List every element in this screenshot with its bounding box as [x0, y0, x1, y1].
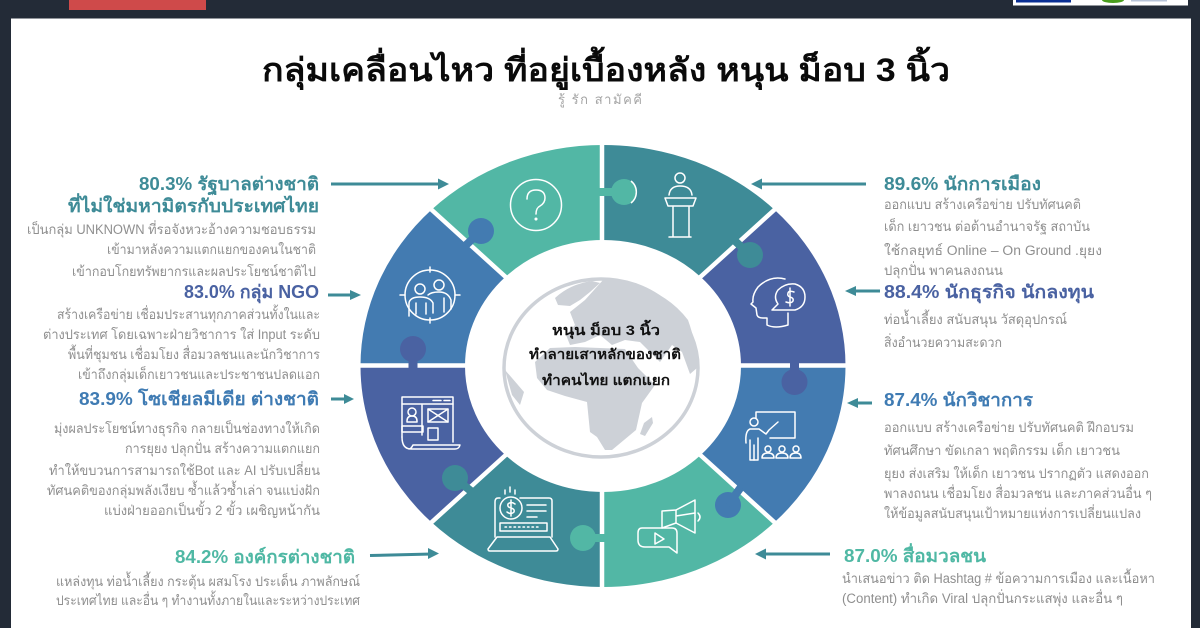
- text block: foreign governments: เป็นกลุ่ม UNKNOWN ที่รอจังหวะอ้างความชอบธรรม: [27, 220, 316, 238]
- arrow: foreign social media: [331, 394, 354, 404]
- land: Africa: [535, 347, 655, 450]
- arrow: NGO: [328, 290, 361, 300]
- logo strip at top right: [1013, 0, 1188, 6]
- text block: mass media: 87.0% สื่อมวลชน: [844, 543, 987, 566]
- center text: ทำลายเสาหลักของชาติ: [529, 346, 681, 362]
- land: Greenland: [555, 281, 600, 306]
- puzzle knob: indigo into blue: [782, 361, 808, 395]
- red tab at top: [69, 0, 206, 10]
- text block: foreign social media: แบ่งฝ่ายออกเป็นขั้ว 2 ขั้ว เผชิญหน้ากัน: [104, 500, 320, 518]
- text block: foreign governments: 80.3% รัฐบาลต่างชาติ: [139, 174, 319, 196]
- segment: right-upper indigo: [701, 210, 846, 366]
- text block: politicians: ออกแบบ สร้างเครือข่าย ปรับทัศนคติ: [884, 197, 1081, 212]
- arrow: politicians: [751, 178, 866, 190]
- icon: question mark: [510, 180, 562, 230]
- text block: international organizations: [56, 546, 360, 608]
- text block: academics: ออกแบบ สร้างเครือข่าย ปรับทัศนคติ ฝึกอบรม: [884, 420, 1134, 435]
- text block: academics: ให้ข้อมูลสนับสนุนเป้าหมายแห่งการเปลี่ยนแปลง: [884, 504, 1141, 522]
- text block: mass media: นำเสนอข่าว ติด Hashtag # ข้อความการเมือง และเนื้อหา: [842, 568, 1155, 586]
- land: Eurasia: [566, 280, 697, 374]
- center globe: [504, 279, 698, 457]
- puzzle knob: blue into green left: [465, 218, 494, 246]
- text block: politicians: [884, 174, 1102, 279]
- icon: people in target: [400, 267, 460, 323]
- text block: academics: ทัศนศึกษา ขัดเกลา พฤติกรรม เด็ก เยาวชน: [884, 441, 1120, 458]
- text block: foreign social media: 83.9% โซเชียลมีเดีย ต่างชาติ: [79, 388, 319, 409]
- text block: NGO: [43, 282, 320, 383]
- text block: business: สิ่งอำนวยความสะดวก: [884, 333, 1002, 350]
- icon: speaker at podium: [665, 173, 696, 237]
- text block: international organizations: แหล่งทุน ท่อน้ำเลี้ยง กระตุ้น ผสมโรง ประเด็น ภาพลักษณ์: [56, 571, 360, 590]
- text block: academics: 87.4% นักวิชาการ: [884, 390, 1033, 410]
- text block: politicians: ใช้กลยุทธ์ Online – On Ground .ยุยง: [884, 242, 1102, 259]
- segment: top-right teal: [603, 145, 774, 277]
- text block: foreign social media: ทัศนคติของกลุ่มพลังเงียบ ซ้ำแล้วซ้ำเล่า จนแบ่งฝัก: [47, 480, 320, 499]
- text block: NGO: พื้นที่ชุมชน เชื่อมโยง สื่อมวลชนและนักวิชาการ: [68, 344, 320, 363]
- puzzle knob: teal into indigo left: [442, 465, 472, 492]
- center text: หนุน ม็อบ 3 นิ้ว: [552, 319, 660, 339]
- text block: foreign governments: เข้ากอบโกยทรัพยากรและผลประโยชน์ชาติไป: [72, 263, 316, 279]
- text block: business: ท่อน้ำเลี้ยง สนับสนุน วัสดุอุปกรณ์: [884, 309, 1067, 328]
- text block: foreign social media: การยุยง ปลุกปั่น สร้างความแตกแยก: [125, 439, 320, 457]
- icon: teacher with students: [746, 412, 801, 460]
- segment: bottom-left teal: [432, 455, 603, 587]
- text block: international organizations: 84.2% องค์กรต่างชาติ: [175, 546, 355, 567]
- arrow: mass media: [755, 548, 830, 560]
- arrow: international organizations: [370, 548, 439, 559]
- arrow: academics: [847, 398, 872, 408]
- arrow: business: [845, 286, 880, 296]
- text block: NGO: ต่างประเทศ โดยเฉพาะฝ่ายวิชาการ ใส่ Input ระดับ: [43, 326, 320, 342]
- ring diagram: [355, 140, 851, 592]
- center text: [529, 319, 681, 388]
- text block: politicians: ปลุกปั่น พาคนลงถนน: [884, 261, 1003, 279]
- text block: academics: พาลงถนน เชื่อมโยง สื่อมวลชน และภาคส่วนอื่น ๆ: [884, 484, 1152, 501]
- text block: foreign governments: ที่ไม่ใช่มหามิตรกับประเทศไทย: [68, 193, 319, 216]
- arrow: foreign governments: [331, 178, 449, 190]
- text block: foreign governments: [27, 174, 319, 279]
- text block: foreign social media: [47, 388, 320, 518]
- text block: business: 88.4% นักธุรกิจ นักลงทุน: [884, 282, 1095, 304]
- text block: mass media: [842, 543, 1155, 607]
- segment: right-lower blue: [701, 366, 846, 522]
- globe outline: [504, 279, 698, 457]
- text block: NGO: เข้าถึงกลุ่มเด็กเยาวชนและประชาชนปลดแอก: [78, 365, 320, 383]
- segment: left-upper blue: [360, 210, 505, 366]
- text block: international organizations: ประเทศไทย และอื่น ๆ ทำงานทั้งภายในและระหว่างประเทศ: [56, 590, 360, 608]
- icon: head with dollar bubble: [751, 278, 805, 327]
- puzzle knob: teal into indigo: [734, 240, 763, 268]
- land: South America: [505, 370, 524, 405]
- segment: bottom-right green: [603, 455, 774, 587]
- text block: business: [884, 282, 1095, 350]
- title: กลุ่มเคลื่อนไหว ที่อยู่เบื้องหลัง หนุน ม็อบ 3 นิ้ว: [262, 46, 950, 91]
- text block: NGO: 83.0% กลุ่ม NGO: [184, 282, 319, 304]
- puzzle knob: indigo into blue left: [400, 336, 426, 370]
- text block: academics: ยุยง ส่งเสริม ให้เด็ก เยาวชน ปรากฏตัว แสดงออก: [884, 464, 1149, 482]
- text block: mass media: (Content) ทำเกิด Viral ปลุกปั่นกระแสพุ่ง และอื่น ๆ: [842, 589, 1123, 607]
- puzzle knob: blue into green: [715, 487, 741, 518]
- text block: foreign social media: ทำให้ขบวนการสามารถใช้Bot และ AI ปรับเปลี่ยน: [49, 461, 320, 478]
- subtitle: รู้ รัก สามัคคี: [558, 92, 642, 108]
- text block: politicians: 89.6% นักการเมือง: [884, 174, 1041, 194]
- land: Madagascar: [640, 417, 653, 436]
- puzzle knob: green into teal: [598, 179, 637, 205]
- icon: megaphone and video bubble: [638, 500, 700, 553]
- text block: foreign social media: มุ่งผลประโยชน์ทางธุรกิจ กลายเป็นช่องทางให้เกิด: [54, 419, 320, 437]
- icon: web page layout: [402, 397, 460, 449]
- text block: foreign governments: เข้ามาหลังความแตกแยกของคนในชาติ: [107, 241, 316, 257]
- icon: laptop with dollar: [488, 487, 558, 551]
- center text: ทำคนไทย แตกแยก: [542, 371, 670, 388]
- segment: left-lower indigo: [360, 366, 505, 522]
- text block: NGO: สร้างเครือข่าย เชื่อมประสานทุกภาคส่วนทั้งในและ: [57, 304, 320, 323]
- segment: top-left green: [432, 145, 603, 277]
- text block: academics: [884, 390, 1152, 522]
- puzzle knob: green into teal bottom: [570, 525, 606, 551]
- text block: politicians: เด็ก เยาวชน ต่อต้านอำนาจรัฐ สถาบัน: [884, 217, 1090, 235]
